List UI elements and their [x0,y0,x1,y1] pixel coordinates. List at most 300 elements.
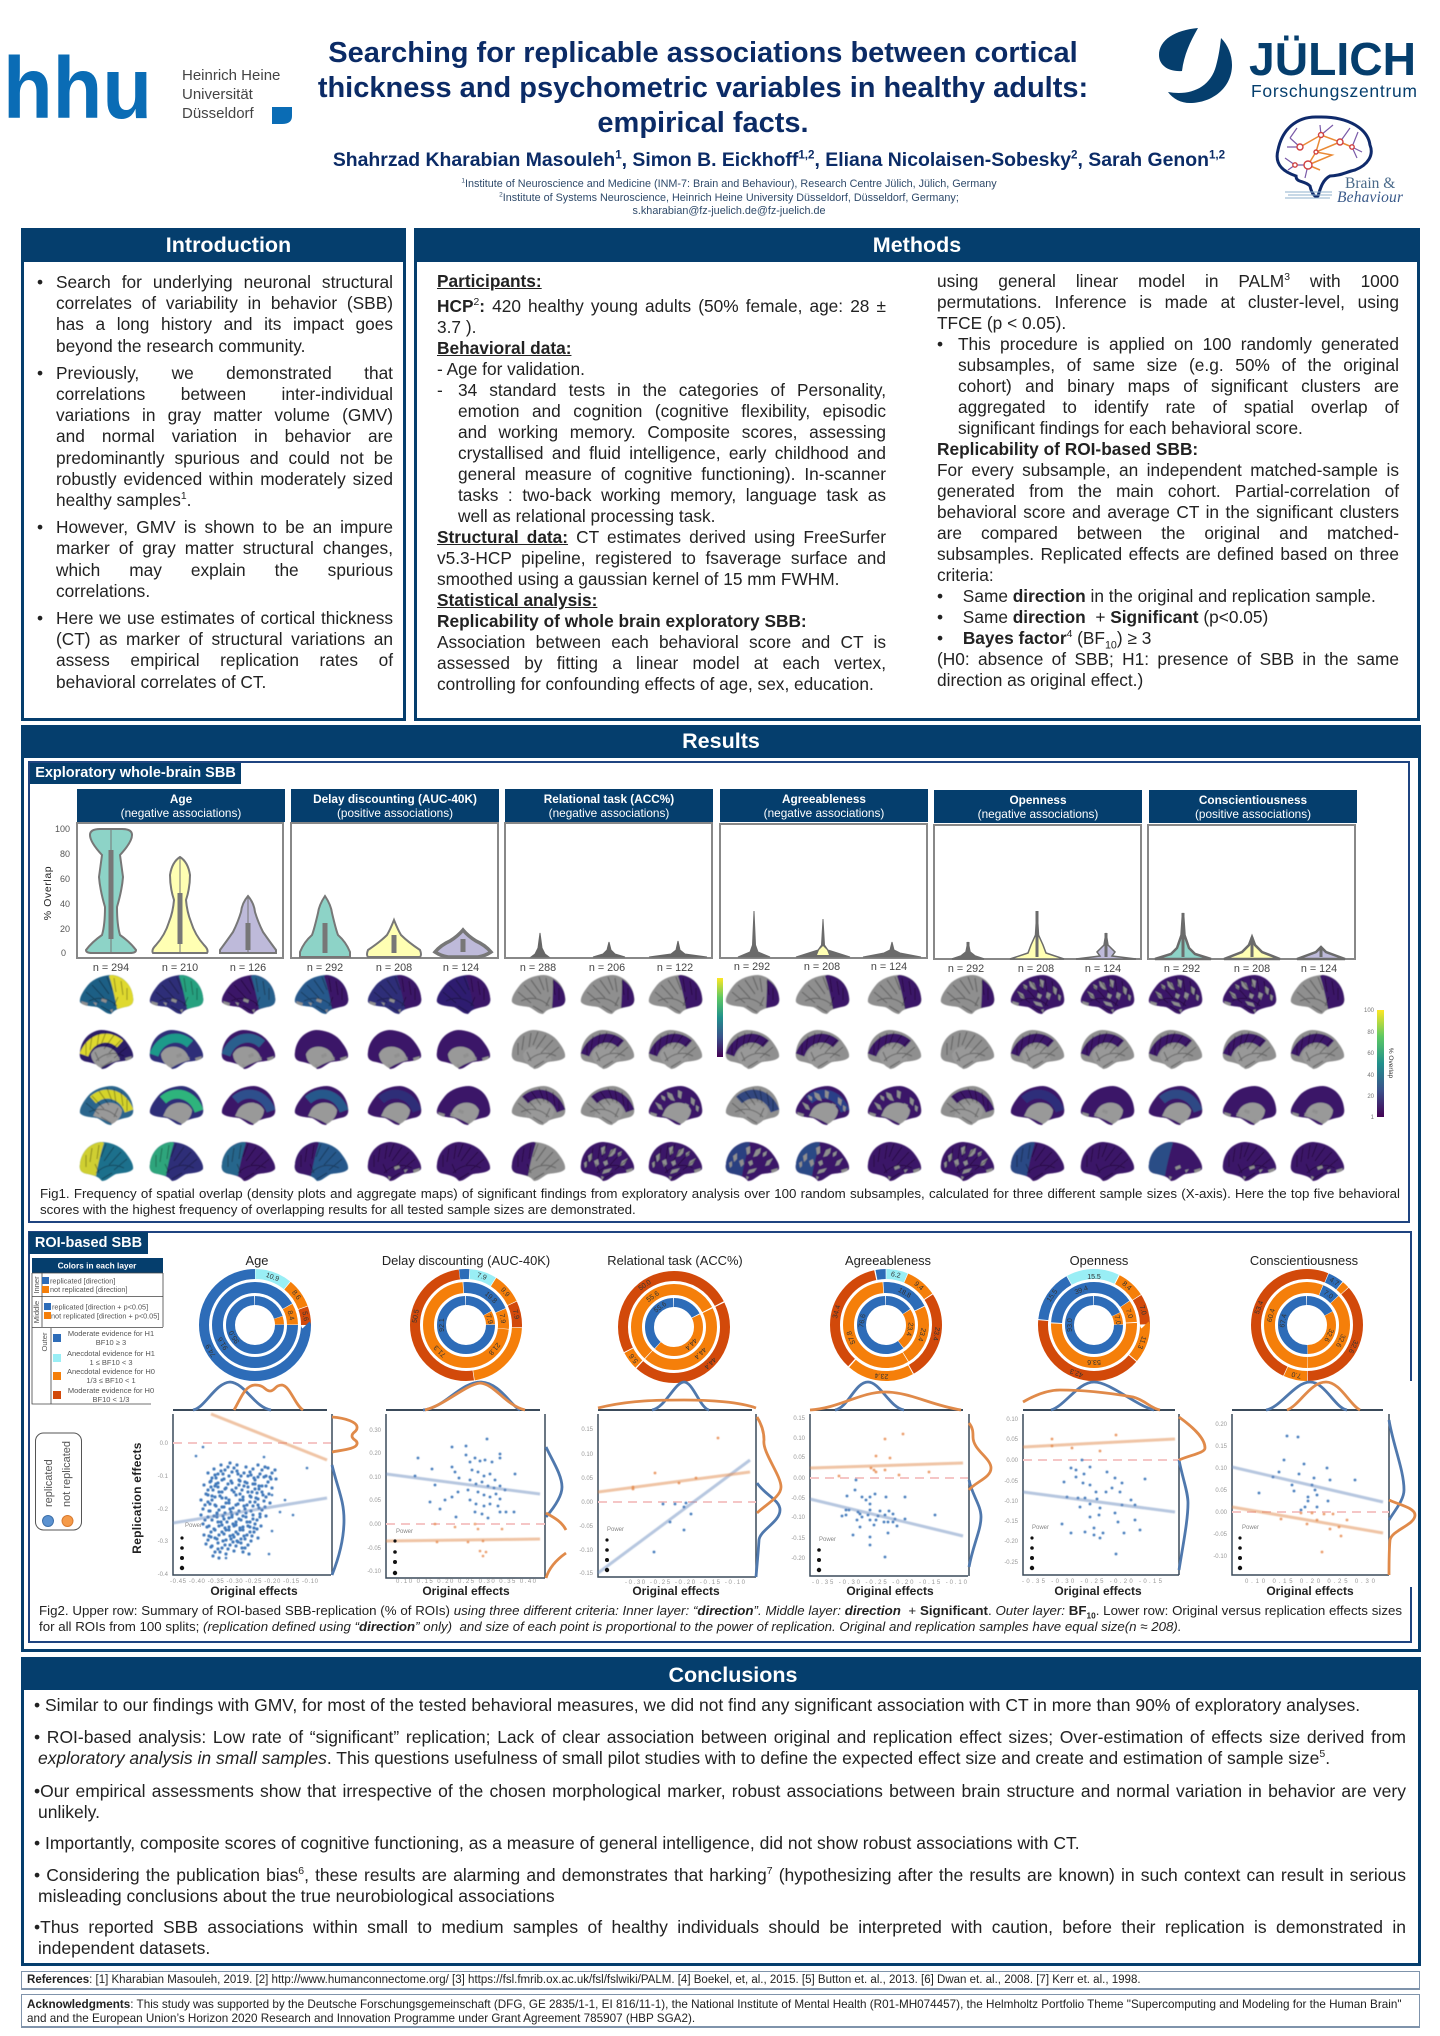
text: methods left column: 34 standard tests in the categories of Personality, [458,380,886,400]
text: methods left column: Statistical analysis: [437,590,597,610]
sample size labels: n = 124 [1301,963,1337,975]
donut: Openness: 15.5 [1046,1288,1059,1304]
text: methods right column: • [937,607,943,627]
donut: Relational task: 50.0 [637,1279,653,1292]
text: methods right column: For every subsample, an independent matched-sample is [937,460,1399,480]
legend: colors in each layer: 1/3 ≤ BF10 < 1 [86,1376,136,1385]
text: introduction bullets: variations in gray matter volume (GMV) [56,405,393,425]
text: methods left column: tasks : two-back working memory, language task as [458,485,886,505]
scatter: Agreeableness: -0.05 [791,1496,806,1502]
scatter: Age: -0.4 [158,1572,169,1578]
scatter: Age: 0.0 [160,1441,169,1447]
heading: Introduction [21,228,406,262]
affiliations [461,177,997,217]
text: methods right column: Bayes factor4 (BF10) ≥ 3 [963,628,1151,651]
text: conclusion 4: • Importantly, composite scores of cognitive functioning, as a measure of general intelligence, did not show robust associations with CT. [34,1833,1080,1853]
sample size labels: n = 124 [871,961,907,973]
donut: Openness: 8.4 [1120,1281,1133,1292]
sample size labels: n = 206 [589,962,625,974]
legend: colors in each layer: replicated [direction + p<0.05] [52,1302,148,1312]
donut titles: Age [246,1253,268,1268]
donut: Age: 8.6 [290,1289,302,1301]
legend: replicated vs not replicated: replicated [43,1459,55,1507]
text: • [37,608,43,628]
text: conclusion 1: • Similar to our findings with GMV, for most of the tested behavioral measures, we did not find any significant association with CT in more than 90% of exploratory analyses. [34,1695,1360,1715]
sample size labels: n = 292 [1164,963,1200,975]
scatter: Openness: -0.35 -0.30 -0.25 -0.20 -0.15 [1022,1579,1163,1585]
panel: Results [21,725,1421,1652]
donut: Agreeableness: 23.4 [931,1326,940,1341]
donut: Openness: 42.3 [1069,1367,1084,1378]
colorbar: % overlap: 20 [1367,1094,1375,1100]
text: conclusion 2: exploratory analysis in small samples. This questions usefulness of small pilot studies with to define the expected effect size and create and estimation of sample size5. [38,1748,1330,1768]
text: conclusion 3: •Our empirical assessments show that irrespective of the chosen morphological marker, robust associations between brain structure and normal variation in behavior are very [34,1781,1406,1801]
donut: Relational task: 55.6 [653,1301,668,1315]
panel: Methods [414,228,1420,721]
donut: Age: 74.9 [205,1343,218,1358]
legend: colors in each layer: 1 ≤ BF10 < 3 [89,1358,133,1367]
brain maps: Delay discounting [295,975,490,1181]
logo: Heinrich Heine University [3,40,292,137]
logo: Brain and Behaviour: Brain & [1345,175,1395,192]
text: conclusion 5: • Considering the publication bias6, these results are alarming and demonstrates that harking7 (hypothesizing after the results are known) in such context can result in serious [34,1865,1406,1885]
violins: Agreeableness [738,911,921,957]
text: conclusion 6: independent datasets. [38,1938,210,1958]
donut: Openness: 39.4 [1074,1285,1089,1296]
donut: Agreeableness: 34.4 [832,1304,842,1319]
text: methods right column: Same direction in the original and replication sample. [963,586,1376,606]
donut: Openness: 15.5 [1087,1274,1101,1281]
logo: Heinrich Heine University: Düsseldorf [182,105,255,122]
sample size labels: n = 288 [520,962,556,974]
text: methods left column: Participants: [437,271,542,291]
donut: Relational task: 44.4 [683,1336,698,1351]
donut: Conscientiousness: 7.0 [1291,1370,1302,1379]
text: • [37,272,43,292]
colorbar: % overlap: 60 [1367,1051,1375,1057]
affiliations: 2Institute of Systems Neuroscience, Heinrich Heine University Düsseldorf, Düsseldorf, Germany; [499,191,959,204]
scatter: Delay discounting: 0.30 [369,1428,382,1434]
text: methods left column: 3.7 ). [437,317,476,337]
donut: Relational task: 5.6 [628,1352,640,1364]
donut: Agreeableness [832,1271,940,1379]
legend: colors in each layer: Anecdotal evidence for H0 [67,1367,155,1376]
logo: Forschungszentrum Jülich [1159,28,1417,103]
legend: colors in each layer: replicated [direction] [50,1276,115,1286]
donut: Delay discounting [412,1272,520,1376]
caption: figure 2 [39,1603,1402,1634]
donut: Delay discounting: 7.9 [476,1272,487,1282]
donut: Conscientiousness: 67.4 [1279,1313,1289,1328]
logo: Forschungszentrum Jülich: JÜLICH [1249,33,1416,85]
title: thickness and psychometric variables in healthy adults: [318,72,1088,104]
header: Relational task strip [505,789,713,822]
scatter: Openness: -0.15 [1004,1519,1019,1525]
text: introduction bullets: healthy samples1. [56,490,191,510]
donut: Age: 91.6 [217,1336,230,1351]
text: methods right column [937,271,1400,690]
donut titles [246,1253,1358,1268]
text: methods right column: • [937,586,943,606]
heading: Methods [414,228,1420,262]
text: introduction bullets: which may explain the spurious [56,560,393,580]
plot frames [77,823,1355,959]
colorbar: % overlap: 40 [1367,1073,1375,1079]
legend: replicated vs not replicated: not replicated [61,1441,73,1507]
scatter: Conscientiousness: -0.10 [1213,1554,1228,1560]
text: methods left column: v5.3-HCP pipeline, registered to fsaverage surface and [437,548,886,568]
text: methods left column: smoothed using a gaussian kernel of 15 mm FWHM. [437,569,839,589]
donut: Openness [1043,1274,1147,1378]
text: introduction bullets: correlates of variability in behavior (SBB) [56,293,393,313]
caption: figure 1 [40,1186,1400,1217]
donut: Delay discounting: 92.1 [439,1318,446,1332]
scatter: Relational task: 0.00 [581,1500,594,1506]
scatter: Delay discounting: 0.00 [369,1522,382,1528]
logo: Brain and Behaviour [1276,116,1404,206]
text: methods left column: general measure of cognitive functioning). In-scanner [458,464,886,484]
scatter: Relational task: 0.05 [581,1476,594,1482]
sample size labels: n = 122 [657,962,693,974]
text: methods right column: using general linear model in PALM3 with 1000 [937,271,1399,291]
heading: exploratory whole-brain SBB: Exploratory whole-brain SBB [35,765,236,781]
text: conclusion 2: • ROI-based analysis: Low rate of “significant” replication; Lack of clear association between original and replication effect sizes; Over-estimation of effects size derived from [34,1727,1406,1747]
caption: figure 1: scores with the highest frequency of overlapping results for all tested sample sizes are demonstrated. [40,1202,636,1217]
violins: Age [86,829,276,953]
scatter: Conscientiousness: -0.05 [1213,1532,1228,1538]
text: introduction bullets: Here we use estimates of cortical thickness [56,608,393,628]
logo: Heinrich Heine University: Universität [182,86,254,103]
header: Age strip: Age [170,792,192,806]
donut: Openness: 7.0 [1113,1315,1121,1326]
scatter: Delay discounting: -0.10 [367,1569,382,1575]
scatter: Delay discounting [367,1382,566,1585]
scatter: Relational task: 0.10 [581,1452,594,1458]
violins: Relational task [531,933,707,957]
legend: colors in each layer: Inner [32,1276,41,1294]
scatter: Agreeableness: Power [819,1537,836,1543]
text: conclusion 2 [34,1727,1406,1768]
donut titles: Openness [1070,1253,1128,1268]
header: Agreeableness strip: Agreeableness [782,792,866,806]
panel: Introduction [21,228,406,721]
colorbar: % overlap: % Overlap [1387,1048,1394,1079]
colorbar: % overlap: 80 [1367,1030,1375,1036]
scatter: Agreeableness: -0.35 -0.30 -0.25 -0.20 -0.15 -0.10 [812,1580,968,1586]
scatter: Delay discounting: Power [396,1529,413,1535]
header: Openness strip: Openness [1009,793,1067,807]
text: methods right column: behavioral score and average CT in the significant clusters [937,502,1399,522]
heading: ROI-based SBB: ROI-based SBB [35,1235,142,1251]
legend: colors in each layer: Moderate evidence for H1 [68,1329,154,1338]
text: methods left column: controlling for confounding effects of age, sex, education. [437,674,874,694]
donut: Relational task: 44.4 [692,1346,707,1360]
sample size labels: n = 292 [307,962,343,974]
donut: Delay discounting: 7.9 [511,1309,520,1320]
text: methods left column: Replicability of whole brain exploratory SBB: [437,611,807,631]
text: introduction bullets: correlations between inter-individual [56,384,393,404]
sample size labels: n = 208 [1018,963,1054,975]
text: methods right column: • [937,334,943,354]
scatter: Agreeableness: 0.15 [793,1416,806,1422]
title: Searching for replicable associations between cortical [328,37,1078,69]
scatter: Openness: -0.25 [1004,1560,1019,1566]
header: Delay discounting strip [291,789,499,822]
text: methods left column: Association between each behavioral score and CT is [437,632,886,652]
legend: colors in each layer: Colors in each layer [58,1260,137,1270]
scatter: Openness: 0.05 [1006,1437,1019,1443]
panel: ROI-based SBB [28,1231,1412,1643]
text: introduction bullets: (CT) as marker of structural variations an [56,629,393,649]
text: methods left column: - [437,380,443,400]
text: introduction bullets: robustly evidenced within moderately sized [56,469,393,489]
donut: Relational task: 44.4 [702,1355,717,1370]
text: introduction bullets: Previously, we demonstrated that [56,363,393,383]
y axis: % overlap: 40 [60,899,70,909]
text: methods left column: assessed by fitting a linear model at each vertex, [437,653,886,673]
text: conclusion 3 [34,1781,1406,1822]
sample size labels: n = 292 [948,963,984,975]
panel: exploratory whole-brain SBB [28,761,1410,1223]
header: Age strip [77,789,285,822]
scatter: Openness: -0.20 [1004,1539,1019,1545]
donut: Agreeableness: 6.2 [890,1271,901,1280]
scatter: Conscientiousness: Power [1242,1525,1259,1531]
donut: Conscientiousness: 60.4 [1267,1308,1277,1323]
donut: Openness: 11.3 [1136,1335,1147,1350]
text: methods right column: TFCE (p < 0.05). [937,313,1066,333]
sample size labels: n = 292 [734,961,770,973]
donut: Openness: 53.6 [1087,1358,1101,1365]
text: methods right column: subsamples, of same size (e.g. 50% of the original [958,355,1399,375]
colorbar: % overlap [1364,1008,1394,1121]
text: methods right column: are compared between the original and matched- [937,523,1399,543]
text: • [37,363,43,383]
text: conclusion 5: misleading conclusions about the true neurobiological associations [38,1886,555,1906]
colorbar: middle [717,978,723,1057]
panel: Conclusions [21,1657,1421,1966]
heading: Conclusions [21,1657,1421,1690]
donut: Agreeableness: 57.8 [846,1330,857,1345]
heading: Conclusions: Conclusions [668,1663,798,1687]
legend: colors in each layer: Outer [40,1332,49,1352]
scatter: Age: -0.1 [158,1474,169,1480]
colorbar: % overlap: 1 [1371,1115,1375,1121]
text: introduction bullets: marker of gray matter structural changes, [56,538,393,558]
donut: Agreeableness: 9.4 [912,1281,925,1292]
text: methods right column: significant findings for each behavioral score. [958,418,1303,438]
donut: Delay discounting: 19.8 [483,1291,498,1305]
legend: colors in each layer: not replicated [direction + p<0.05] [51,1312,159,1320]
text: introduction bullets: behavioral correlates of CT. [56,672,266,692]
logo: Brain and Behaviour: Behaviour [1337,189,1404,206]
donut: Agreeableness: 23.4 [916,1327,926,1342]
text: introduction bullets: has a long history and its impact goes [56,314,393,334]
header: Relational task strip: Relational task (ACC%) [544,792,674,806]
donut: Delay discounting: 21.8 [487,1341,501,1356]
logo: Heinrich Heine University: Heinrich Heine [182,67,280,84]
heading: Methods: Methods [873,233,961,257]
text: conclusion 5 [34,1865,1406,1906]
references: References: [1] Kharabian Masouleh, 2019. [2] http://www.humanconnectome.org/ [3] https://fsl.fmrib.ox.ac.uk/fsl/fslwiki/PALM. [4] Boekel, et, al., 2015. [5] Button et. al., 2013. [6] Dwan et. al., 2008. [7] Kerr et. al., 1998. [27,1974,1141,1986]
scatter: Agreeableness: -0.10 [791,1515,806,1521]
donut: Relational task [623,1276,725,1378]
text: methods left column: HCP2: 420 healthy young adults (50% female, age: 28 ± [437,296,886,316]
scatter: Openness: 0.00 [1006,1458,1019,1464]
donut: Conscientiousness: 32.6 [1322,1327,1334,1343]
y axis title: replication effects: Replication effects [130,1442,144,1554]
scatter: Age: Power [185,1523,202,1529]
scatter: Delay discounting: 0.10 [369,1475,382,1481]
brain maps: Agreeableness [726,975,921,1181]
text: introduction bullets: However, GMV is shown to be an impure [56,517,393,537]
donut: Delay discounting: 7.9 [498,1313,506,1324]
sample size labels: n = 124 [1085,963,1121,975]
brain maps: Openness [941,975,1134,1181]
legend: colors in each layer: Moderate evidence for H0 [68,1386,154,1395]
legend: colors in each layer: BF10 < 1/3 [93,1395,129,1404]
donut: Delay discounting: 71.3 [433,1343,447,1358]
sample size labels: n = 294 [93,962,129,974]
y axis: % overlap: 0 [61,948,66,958]
header: Conscientiousness strip: Conscientiousness [1199,793,1307,807]
text: introduction bullets: and normal variation in behavior are [56,426,393,446]
scatter: Conscientiousness: 0.10 0.15 0.20 0.25 0.30 [1245,1579,1376,1585]
text: methods right column: generated from the main cohort. Partial-correlation of [937,481,1399,501]
legend: colors in each layer: not replicated [direction] [50,1285,127,1294]
text: methods right column: permutations. Inference is made at cluster-level, using [937,292,1399,312]
colorbar: % overlap: 100 [1364,1008,1375,1014]
scatter: Conscientiousness: 0.20 [1215,1422,1228,1428]
donut titles: Conscientiousness [1250,1253,1358,1268]
text: methods left column: and working memory. Composite scores, assessing [458,422,886,442]
donut: Openness: 93.0 [1067,1318,1074,1332]
text: introduction bullets: assess empirical replication rates of [56,650,393,670]
scatter: Relational task: -0.10 [579,1548,594,1554]
heading: Results [21,725,1421,758]
text: methods left column: crystallised and fluid intelligence, early childhood and [458,443,886,463]
donut: Delay discounting: 50.5 [412,1309,421,1324]
scatter: Agreeableness: 0.05 [793,1455,806,1461]
scatter: Conscientiousness: 0.05 [1215,1488,1228,1494]
scatter: Relational task [579,1382,781,1586]
header: Delay discounting strip: (positive associations) [337,806,453,820]
scatter: Age [158,1382,357,1585]
y axis: % overlap: 80 [60,849,70,859]
acknowledgments: Acknowledgments: This study was supported by the Deutsche Forschungsgemeinschaft (DFG, GE 2835/1-1, EI 816/11-1), the National Institute of Mental Health (R01-MH074457), the Helmholtz Portfolio Theme "Supercomputing and Modeling for the Human Brain" [27,1998,1401,2011]
donut: Conscientiousness: 7.0 [1322,1289,1334,1301]
donut: Age: 8.4 [286,1310,295,1321]
logo: Forschungszentrum Jülich: Forschungszentrum [1251,81,1417,101]
scatter: Openness: -0.05 [1004,1479,1019,1485]
header: Delay discounting strip: Delay discounting (AUC-40K) [313,792,477,806]
scatter: Delay discounting: 0.10 0.15 0.20 0.25 0.30 0.35 0.40 [396,1579,537,1585]
scatter: Openness: Power [1032,1525,1049,1531]
legend: colors in each layer: Anecdotal evidence for H1 [67,1349,155,1358]
text: methods right column: aggregated to identify rate of spatial overlap of [958,397,1399,417]
violins: Delay discounting [300,896,491,957]
scatter: Agreeableness: 0.00 [793,1476,806,1482]
text: methods left column: emotion and cognition (cognitive flexibility, episodic [458,401,886,421]
donut: Delay discounting: 7.9 [484,1314,493,1325]
header: Agreeableness strip: (negative associations) [764,806,884,820]
scatter: Agreeableness: -0.20 [791,1556,806,1562]
sample size labels: n = 208 [376,962,412,974]
affiliations: 1Institute of Neuroscience and Medicine (INM-7: Brain and Behaviour), Research Centre Jülich, Jülich, Germany [461,177,997,190]
violins: Conscientiousness [1155,913,1345,959]
scatter: Age: -0.2 [158,1507,169,1513]
text: methods right column: criteria: [937,565,994,585]
caption: figure 2: Fig2. Upper row: Summary of ROI-based SBB-replication (% of ROIs) using three different criteria: Inner layer: “direction”. Middle layer: direction + Significant. Outer layer: BF10. Lower row: Original versus replication effects sizes [39,1603,1402,1621]
header: Conscientiousness strip [1149,790,1357,823]
x axis titles: original effects: Original effects [210,1584,298,1598]
sample size labels: n = 210 [162,962,198,974]
scatter: Openness: -0.10 [1004,1499,1019,1505]
donut: Agreeableness: 76.6 [858,1313,868,1328]
scatter: Agreeableness: 0.10 [793,1436,806,1442]
donut titles: Delay discounting (AUC-40K) [382,1253,550,1268]
donut: Conscientiousness: 53.4 [1254,1300,1265,1315]
sample size labels [93,961,1337,975]
text: introduction bullets: correlations. [56,581,150,601]
text: conclusion 6 [34,1917,1406,1958]
donut: Conscientiousness: 4.7 [1328,1277,1340,1288]
scatter: Openness [1004,1382,1205,1585]
donut: Age: 95.0 [228,1329,241,1344]
header: Conscientiousness strip: (positive associations) [1195,807,1311,821]
donut: Agreeableness: 23.4 [874,1371,889,1379]
text: introduction bullets: Search for underlying neuronal structural [56,272,393,292]
caption: figure 2: for all ROIs from 100 splits; (replication defined using “direction” only) and size of each point is proportional to the power of replication. Original and replication samples have equal size(n ≈ 208). [39,1619,1182,1634]
y axis: % overlap: 100 [55,824,70,834]
text: methods left column [437,271,886,694]
text: methods right column: subsamples. Replicated effects are defined based on three [937,544,1399,564]
text: introduction bullets: beyond the research community. [56,336,305,356]
x axis titles: original effects: Original effects [1266,1584,1354,1598]
scatter: Conscientiousness [1213,1382,1415,1585]
header: Age strip: (negative associations) [121,806,241,820]
y axis: % overlap: % Overlap [42,866,54,920]
donut: Agreeableness: 23.4 [904,1322,914,1337]
y axis: % overlap [42,824,70,958]
donut: Openness: 7.0 [1138,1305,1147,1316]
donut: Age [204,1272,309,1376]
scatter: Relational task: -0.15 [579,1571,594,1577]
affiliations: s.kharabian@fz-juelich.de@fz-juelich.de [633,205,825,217]
text: methods right column: Replicability of ROI-based SBB: [937,439,1198,459]
sample size labels: n = 124 [443,962,479,974]
heading: Results: Results [682,729,760,753]
scatter: Relational task: Power [607,1527,624,1533]
header: Openness strip [934,790,1142,823]
scatter: Openness: 0.10 [1006,1417,1019,1423]
legend: colors in each layer [32,1258,163,1404]
scatter: Relational task: -0.05 [579,1524,594,1530]
brain maps: Relational task [512,975,702,1181]
sample size labels: n = 126 [230,962,266,974]
donut titles: Agreeableness [845,1253,931,1268]
title [318,37,1088,139]
x axis titles: original effects: Original effects [422,1584,510,1598]
text: methods left column: well as relational processing task. [458,506,715,526]
x axis titles: original effects: Original effects [846,1584,934,1598]
donut: Age: 10.9 [265,1272,280,1283]
logo: Heinrich Heine University: hhu [3,40,152,137]
acknowledgments: and and the European Union’s Horizon 2020 Research and Innovation Programme under Grant Agreement 785907 (HBP SGA2). [27,2012,695,2025]
x axis titles: original effects [210,1584,1354,1598]
scatter: Age: -0.3 [158,1539,169,1545]
scatter: Agreeableness: -0.15 [791,1536,806,1542]
